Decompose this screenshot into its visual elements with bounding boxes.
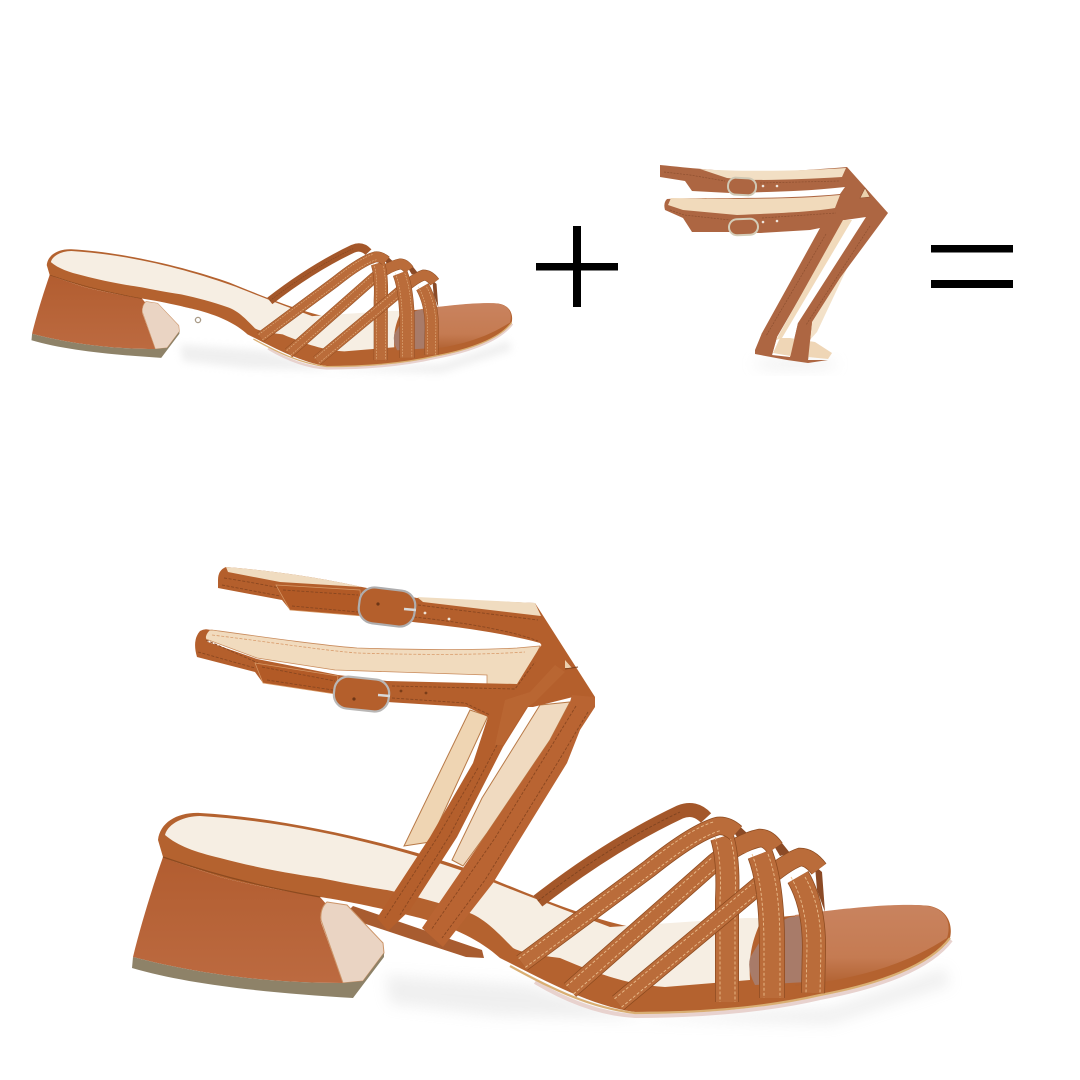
heel inner face [321,902,384,983]
lower buckle [332,675,391,713]
lower buckle [729,218,758,235]
strap B [566,838,775,994]
strap A [519,822,736,967]
upper strap [218,567,565,650]
lower strap, junction and left leg [195,629,595,931]
sandal base [132,810,951,1024]
heel cap [132,953,384,998]
welt line [510,938,950,1013]
upper tab [276,585,362,616]
small base sandal (mule) [31,247,512,373]
upper buckle [728,177,756,196]
upper buckle [357,586,417,628]
outer leg lining [808,262,850,342]
detachable ankle strap piece [660,165,888,368]
right leg over foot pad [790,322,812,360]
upper strap cream slivers [226,567,541,616]
ankle strap assembly [195,567,595,947]
strap holes [400,612,450,694]
strap holes [762,185,778,223]
underfoot strap tab [347,906,484,958]
mauve insole patch [749,915,810,985]
right leg lining [452,702,570,866]
small triangular cut-out [860,188,870,198]
cream foot pad [773,338,832,359]
block heel [133,857,343,983]
upper strap cream lining [700,168,846,180]
plus sign [536,226,618,307]
lower strap lining [202,630,540,685]
cut-out at junction [565,660,578,669]
sole line [535,940,951,1016]
cream insole [165,816,762,987]
equals sign [931,245,1013,288]
inner lining strip [776,220,852,340]
left leg foot [755,333,777,355]
right leg [422,695,595,947]
left leg lining [404,710,488,846]
strap silhouette [660,165,888,363]
strap V1 [715,837,735,1002]
toe bed [795,905,949,986]
gap between legs [772,217,866,357]
large finished sandal [132,567,951,1024]
strap stitching [664,172,870,336]
strap V2 [752,854,780,998]
back strap [538,810,706,901]
heel seam [163,857,320,897]
lower tab [255,663,338,694]
shadow under strap piece [753,360,837,368]
strap C [614,857,819,1007]
strap V3 [791,877,821,993]
footbed rim [158,813,951,1012]
lower strap cream lining [668,195,840,215]
toe straps [519,810,825,1007]
ground shadow [385,968,950,1024]
strap B top arc [740,838,775,848]
dark strap ends [722,817,825,912]
